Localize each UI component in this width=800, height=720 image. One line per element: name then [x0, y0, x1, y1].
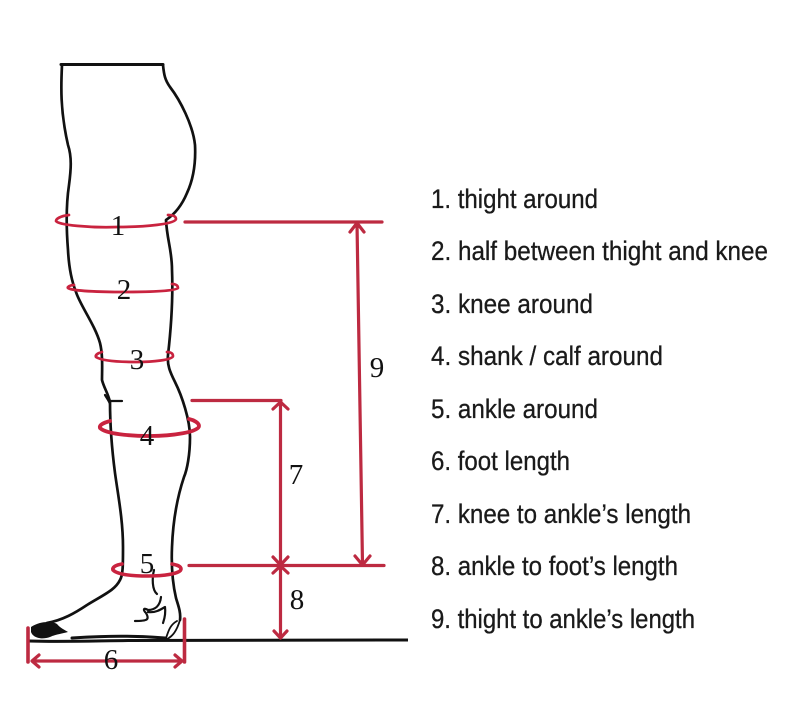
top reference line — [185, 220, 382, 224]
number 2: 2 — [117, 274, 131, 306]
number 6: 6 — [104, 644, 118, 676]
legend 3: 3. knee around — [431, 289, 593, 319]
ring 2 — [68, 284, 178, 292]
ring 4 calf — [100, 419, 199, 436]
measurement rings — [56, 215, 199, 576]
legend 6: 6. foot length — [431, 446, 570, 476]
legend 1: 1. thight around — [431, 184, 598, 214]
arrow 8 — [273, 566, 288, 638]
ankle reference line — [189, 564, 384, 567]
leg illustration — [47, 64, 195, 640]
front of leg outline — [163, 65, 195, 620]
legend 7: 7. knee to ankle’s length — [431, 499, 691, 529]
number 3: 3 — [130, 344, 144, 376]
legend 5: 5. ankle around — [431, 394, 598, 424]
number 4: 4 — [140, 420, 155, 452]
diagram numbers — [104, 210, 384, 676]
number 8: 8 — [290, 584, 304, 616]
legend list — [431, 184, 768, 634]
toes — [31, 622, 68, 638]
waist edge — [61, 63, 163, 66]
legend 4: 4. shank / calf around — [431, 341, 663, 371]
ring 3 knee — [96, 352, 173, 362]
ground line — [29, 640, 408, 641]
legend 9: 9. thight to ankle’s length — [431, 604, 695, 634]
knee reference line — [192, 399, 281, 402]
foot bar right — [183, 619, 186, 662]
back of leg outline — [47, 65, 123, 623]
legend 2: 2. half between thight and knee — [431, 236, 768, 266]
number 5: 5 — [140, 548, 154, 580]
number 9: 9 — [370, 352, 384, 384]
number 1: 1 — [111, 210, 125, 242]
foot length arrow 6 — [32, 655, 182, 667]
arrow 7 — [273, 402, 288, 565]
legend 8: 8. ankle to foot’s length — [431, 551, 678, 581]
ring 1 thigh — [56, 215, 176, 227]
arrow 9 — [350, 223, 370, 565]
ring 5 ankle — [113, 564, 181, 576]
ankle bone detail — [135, 570, 165, 623]
knee crease — [105, 395, 122, 404]
heel detail — [165, 620, 180, 640]
foot bar left — [26, 628, 30, 662]
dimension lines — [28, 222, 384, 667]
number 7: 7 — [289, 459, 303, 491]
sole of foot — [72, 636, 165, 638]
